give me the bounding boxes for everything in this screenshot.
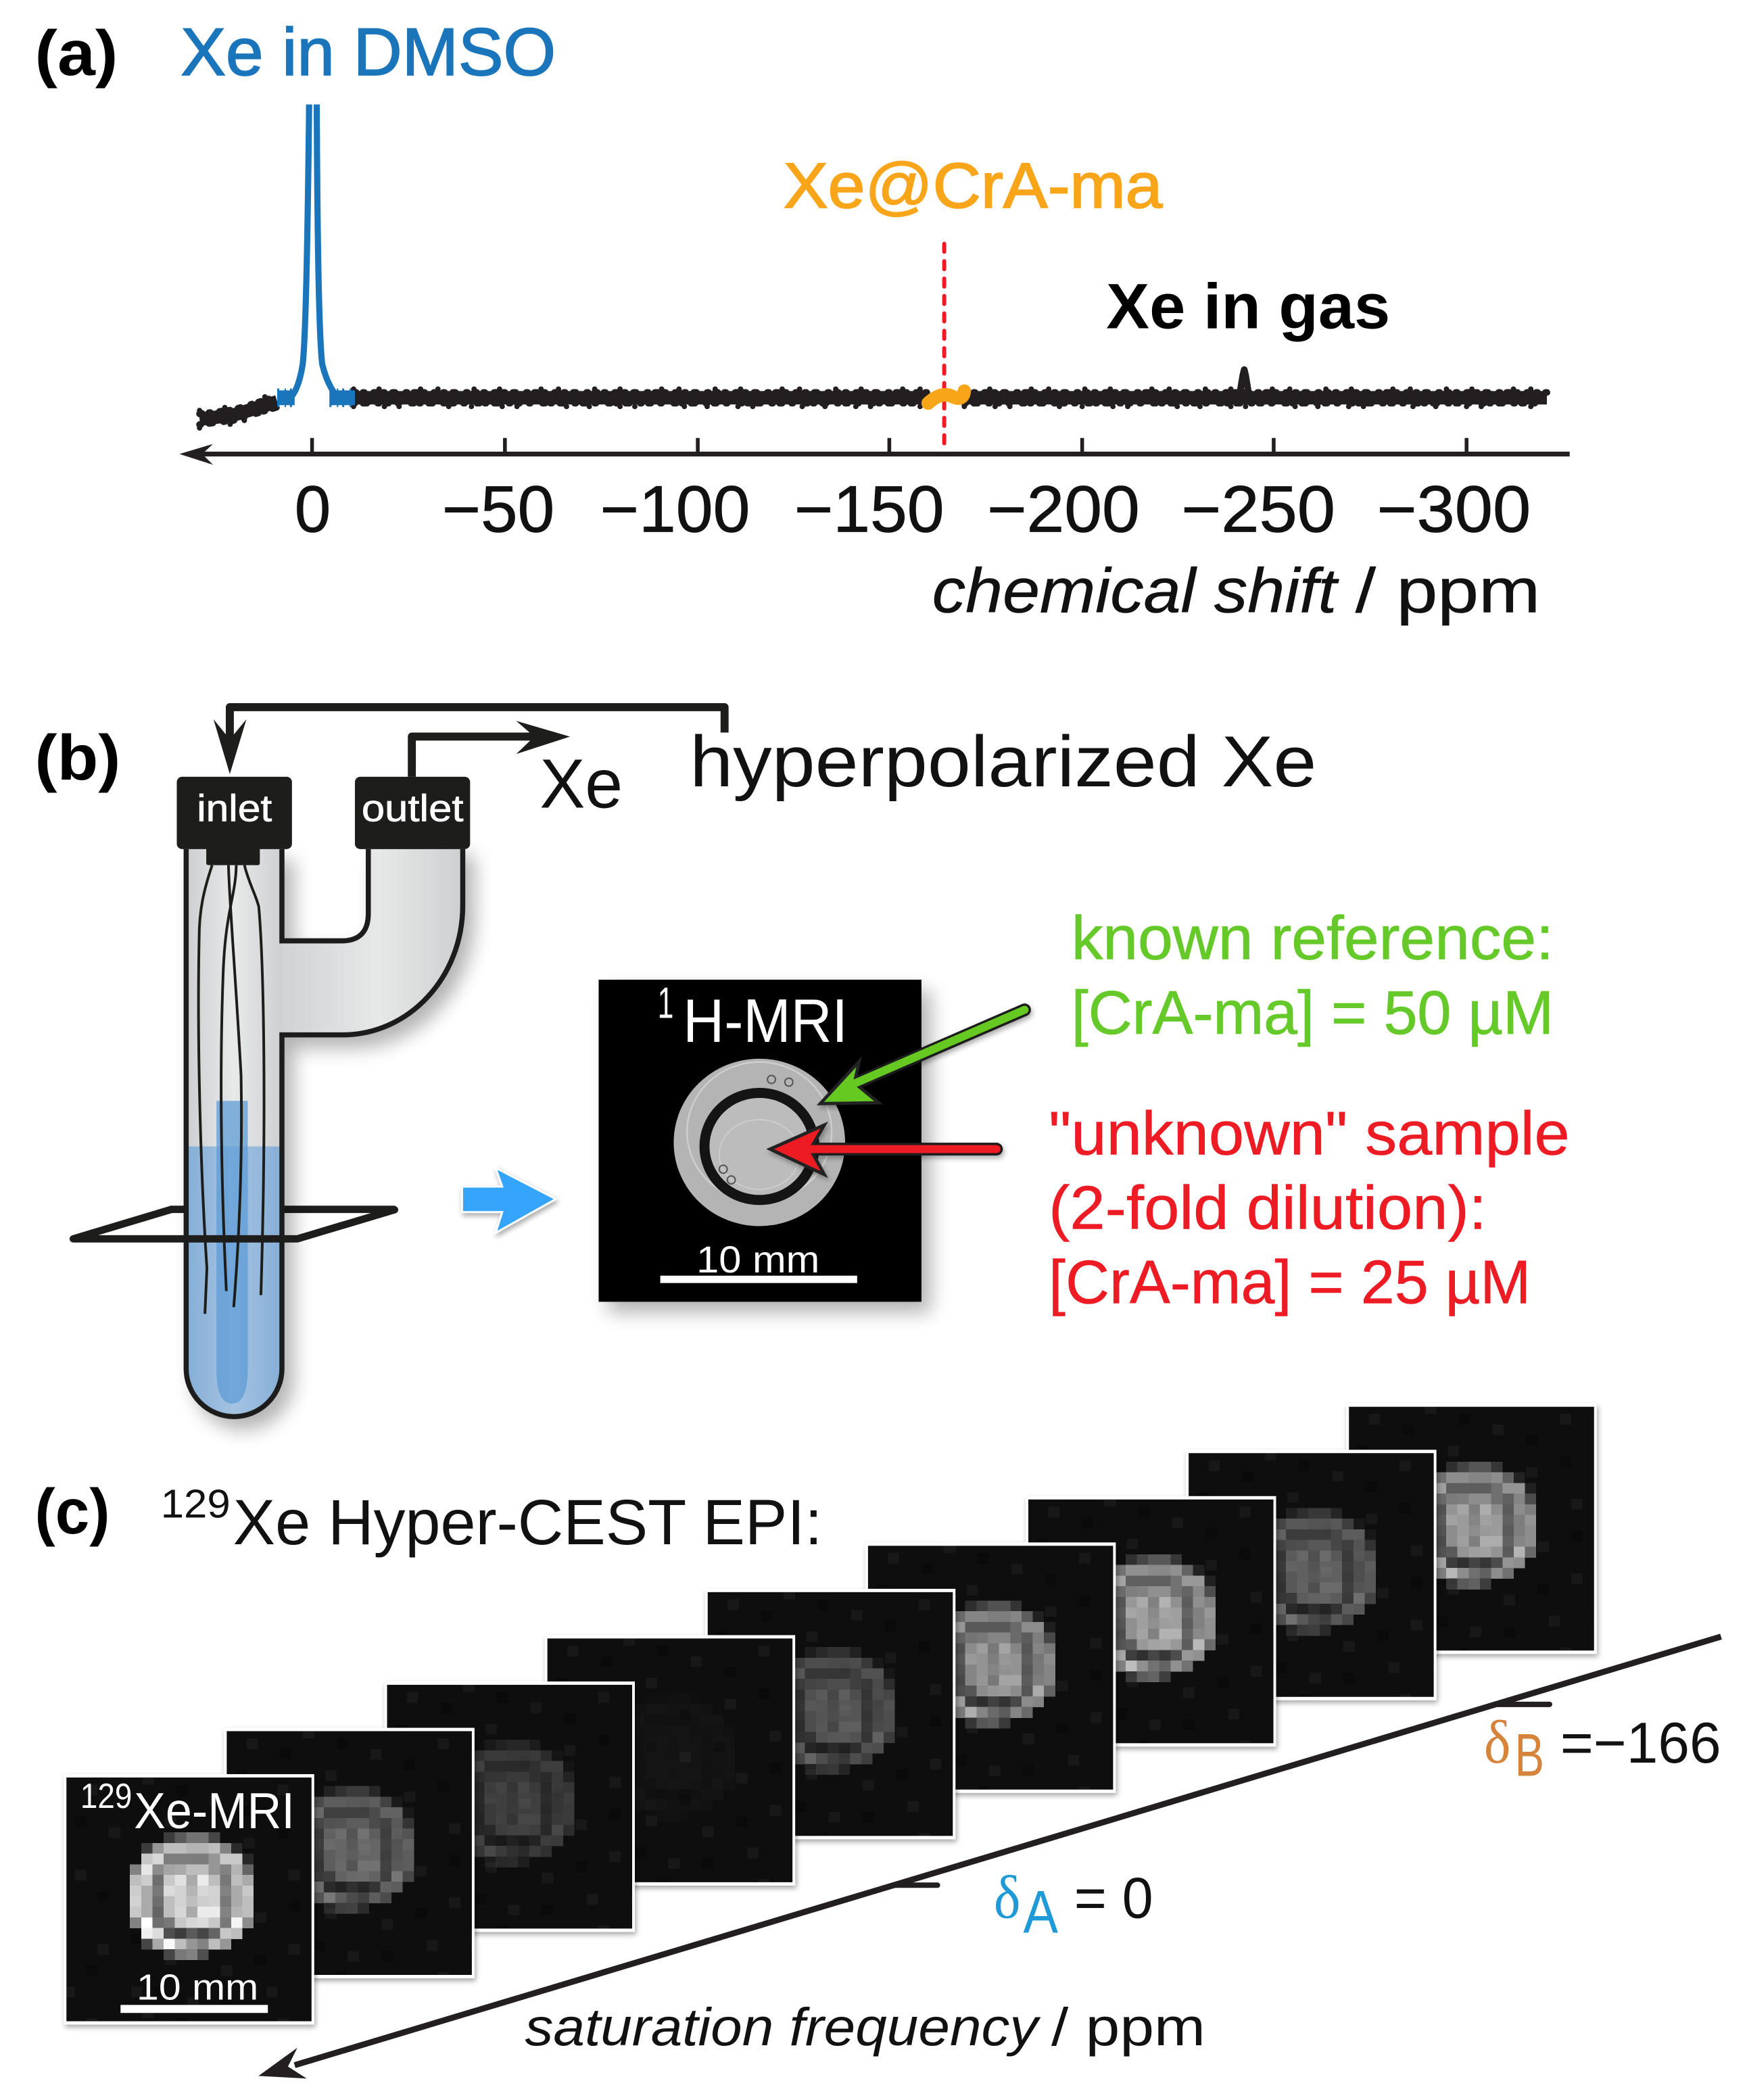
axis tick labels: −200 — [987, 472, 1140, 546]
tile 9 — [1346, 1404, 1597, 1654]
label: Xe in DMSO: Xe in DMSO — [181, 14, 556, 89]
scale bar: 10 mm — [137, 1967, 258, 2007]
arrow: xenon outlet — [412, 721, 570, 777]
label: delta B — [1484, 1708, 1721, 1789]
axis title: chemical shift — [932, 555, 1339, 625]
saturation frequency axis — [258, 1637, 1721, 2078]
arrow: setup to image — [462, 1168, 556, 1233]
tile 2 — [224, 1728, 475, 1978]
arrow: unknown sample — [770, 1125, 997, 1174]
axis tick labels: −50 — [442, 472, 554, 546]
tile 5 — [705, 1589, 955, 1839]
label: Xe@CrA-ma: Xe@CrA-ma — [784, 150, 1163, 222]
tile 1: 129Xe MRI — [64, 1774, 314, 2024]
label: delta A: A — [1023, 1878, 1058, 1945]
phantom cross section — [673, 1059, 845, 1226]
red label: unknown sample — [1049, 1100, 1570, 1316]
tile title: Xe-MRI — [134, 1782, 295, 1839]
stopper — [206, 844, 260, 865]
image title: H-MRI — [683, 987, 848, 1055]
panel: b, setup and 1H MRI — [35, 707, 1570, 1416]
label: delta A — [994, 1863, 1153, 1945]
front edges of imaging plane — [73, 1210, 395, 1239]
label: delta B: δ — [1484, 1708, 1511, 1776]
chemical shift axis — [179, 438, 1570, 464]
panel label (c): (c) — [35, 1476, 110, 1548]
panel label (b): (b) — [35, 722, 120, 794]
icon: sample tube with inlet and outlet — [73, 777, 470, 1416]
scale bar — [661, 1239, 857, 1283]
spectrum trace — [199, 105, 1547, 428]
arrow: known reference — [820, 1010, 1024, 1103]
arrow: xenon inlet — [214, 707, 725, 774]
tile title — [80, 1776, 295, 1839]
tile 7 — [1026, 1496, 1276, 1746]
1H MRI image — [599, 978, 922, 1302]
label: delta A: = 0 — [1074, 1867, 1153, 1931]
panel: c, Hyper-CEST image series — [35, 1404, 1721, 2078]
tube body and side arm — [186, 844, 462, 1416]
label: delta B: =−166 — [1560, 1711, 1721, 1775]
green label: known reference: [CrA-ma] = 50 µM — [1072, 979, 1554, 1047]
axis title: / ppm — [1356, 555, 1540, 625]
axis tick labels: −300 — [1377, 472, 1531, 546]
reference line at Xe@CrA-ma shift — [943, 244, 945, 450]
axis tick labels: −100 — [600, 472, 750, 546]
wires — [199, 865, 264, 1314]
heading: 129Xe Hyper-CEST EPI: Xe Hyper-CEST EPI: — [233, 1487, 822, 1558]
label: hyperpolarized Xe: hyperpolarized Xe — [690, 721, 1316, 802]
label: Xe outlet: Xe — [540, 744, 623, 822]
back edge of imaging plane — [172, 1208, 393, 1211]
axis title: / ppm — [1051, 1997, 1205, 2057]
tile 3 — [385, 1681, 635, 1932]
red label: unknown sample: [CrA-ma] = 25 µM — [1049, 1248, 1531, 1316]
image title: 1 — [658, 978, 673, 1027]
tile 4 — [545, 1635, 795, 1886]
scale bar: 10 mm — [696, 1239, 819, 1281]
inlet cap: inlet — [197, 787, 272, 829]
label: Xe in gas: Xe in gas — [1106, 270, 1390, 342]
axis title: saturation frequency — [525, 1997, 1041, 2057]
tile title: 129 — [80, 1776, 132, 1815]
axis tick labels: 0 — [295, 472, 331, 546]
green label: known reference — [1072, 904, 1554, 1047]
outlet cap: outlet — [362, 787, 463, 829]
scale bar — [120, 1967, 268, 2013]
axis tick labels: −150 — [794, 472, 944, 546]
panel: a, xenon NMR spectrum — [35, 14, 1570, 625]
axis tick labels — [295, 472, 1531, 546]
red label: unknown sample: (2-fold dilution): — [1049, 1174, 1487, 1242]
red label: unknown sample: "unknown" sample — [1049, 1100, 1570, 1168]
tile 8 — [1186, 1450, 1437, 1700]
axis tick labels: −250 — [1181, 472, 1335, 546]
image stack — [64, 1404, 1597, 2024]
outlet cap — [355, 777, 470, 849]
inlet cap — [176, 777, 292, 849]
label: delta A: δ — [994, 1863, 1021, 1932]
tile 6 — [865, 1542, 1116, 1793]
heading: 129Xe Hyper-CEST EPI: 129 — [161, 1481, 231, 1526]
green label: known reference: known reference: — [1072, 904, 1554, 972]
panel label (a): (a) — [35, 18, 118, 89]
label: delta B: B — [1514, 1721, 1544, 1789]
axis title — [932, 555, 1540, 625]
